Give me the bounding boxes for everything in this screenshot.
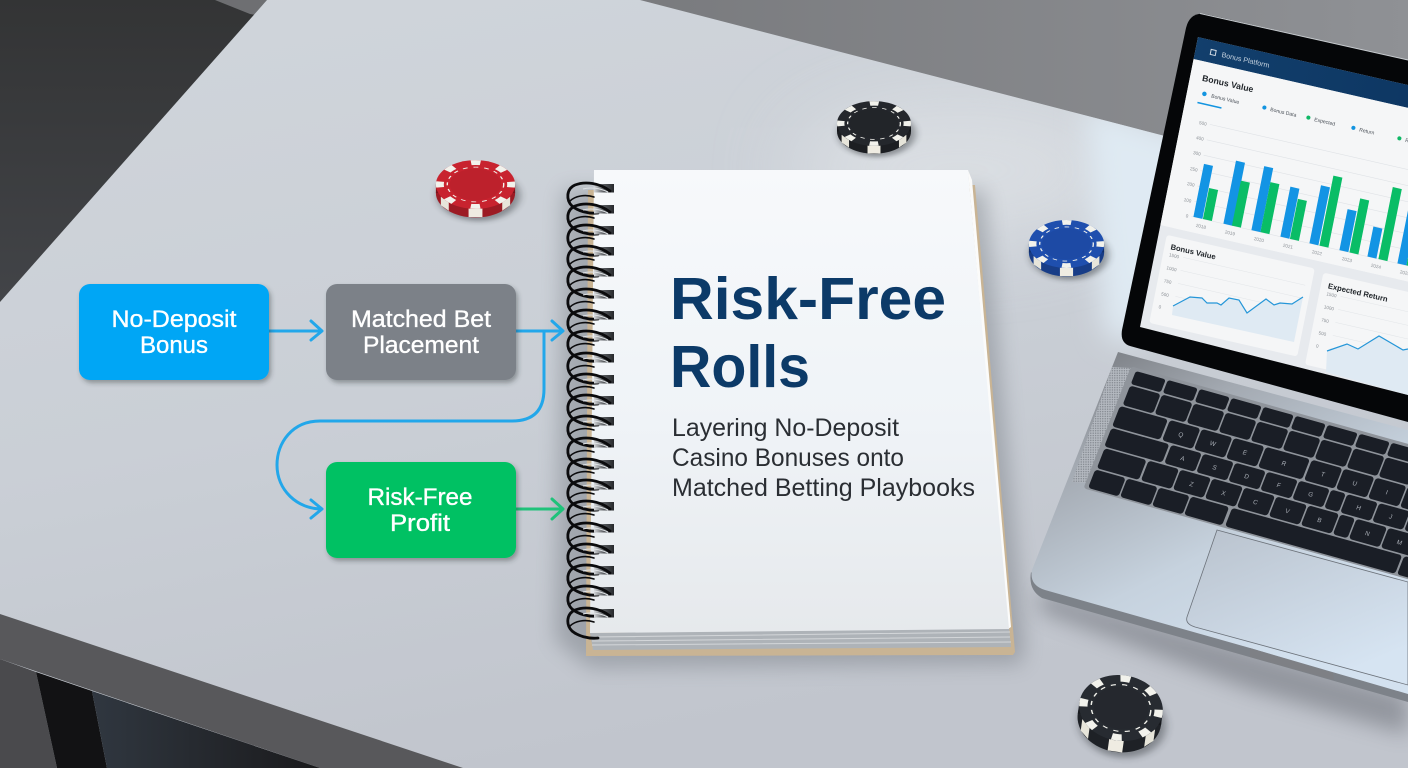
panel: expected return line chart card	[1306, 274, 1408, 370]
laptop base top	[1032, 352, 1408, 694]
y axis labels: 200	[1187, 181, 1195, 188]
line chart: bonus value	[1172, 297, 1303, 342]
dashboard header: Bonus Platform	[1221, 51, 1270, 70]
key legends: I	[1385, 489, 1389, 497]
y axis labels: 250	[1190, 166, 1198, 173]
back page edge	[968, 170, 1011, 629]
title	[670, 266, 946, 400]
key legends: E	[1241, 449, 1248, 457]
y axis labels	[1184, 121, 1207, 218]
bezel highlight	[1200, 14, 1408, 60]
light reflection near laptop	[1084, 115, 1163, 346]
dark floor area top left	[0, 0, 300, 320]
grid and axis	[1191, 124, 1408, 276]
x axis labels: 2024	[1370, 263, 1382, 270]
panel: main bar chart	[1155, 58, 1408, 292]
icon: black poker chip top	[837, 101, 916, 157]
active tab underline	[1197, 102, 1222, 109]
panel: bonus value line chart card: Bonus Value	[1170, 242, 1217, 261]
line chart: expected return	[1326, 336, 1408, 395]
key legends: H	[1355, 504, 1362, 512]
speaker grill	[1072, 367, 1132, 483]
box: no-deposit bonus: Bonus	[140, 332, 208, 359]
key legends: Z	[1188, 481, 1195, 489]
x axis labels: 2022	[1311, 249, 1323, 257]
keyboard keys	[1088, 370, 1408, 589]
key legends: C	[1252, 499, 1259, 507]
flow diagram	[79, 284, 563, 558]
legend: Expected	[1314, 117, 1336, 128]
laptop base side	[1030, 572, 1408, 702]
subtitle: Matched Betting Playbooks	[672, 474, 975, 502]
panel: bonus value line chart card: 1500	[1169, 252, 1180, 260]
panel: expected return line chart card: 0	[1316, 343, 1320, 349]
x axis labels: 2021	[1282, 243, 1294, 250]
legend: Return	[1359, 127, 1375, 137]
legend: Bonus Data	[1270, 107, 1297, 119]
arrow: no-deposit to matched bet	[269, 321, 322, 340]
panel: bonus value line chart card: 1000	[1166, 265, 1177, 273]
box: no-deposit bonus	[79, 284, 269, 380]
panel heading: Bonus Value	[1201, 73, 1255, 94]
y axis labels: 0	[1185, 213, 1189, 219]
x axis labels: 2020	[1253, 236, 1265, 243]
desk front edge	[0, 614, 463, 768]
box: matched bet placement: Placement	[363, 332, 479, 359]
key legends: S	[1211, 464, 1218, 472]
trackpad	[1187, 530, 1408, 685]
box: risk-free profit: Risk-Free	[368, 484, 472, 511]
box: matched bet placement	[326, 284, 516, 380]
key legends: V	[1284, 508, 1291, 516]
trackpad notch	[1250, 648, 1334, 680]
legend: Bonus Value	[1211, 94, 1240, 106]
icon: blue poker chip	[1029, 220, 1109, 280]
key legends: F	[1275, 482, 1282, 490]
light patch on desk upper right	[824, 108, 1080, 233]
floor under the desk	[0, 659, 57, 768]
desk leg	[36, 672, 107, 768]
subtitle: Casino Bonuses onto	[672, 444, 904, 472]
key legends: W	[1209, 440, 1217, 448]
arrow: matched bet to notebook	[516, 321, 563, 340]
panel: expected return line chart card: 750	[1321, 317, 1330, 324]
far floor	[92, 691, 320, 768]
box: risk-free profit	[326, 462, 516, 558]
key legends: A	[1179, 455, 1186, 463]
panel: expected return line chart card: Expected Return	[1327, 281, 1389, 304]
grey wall behind the desk	[215, 0, 1408, 210]
subtitle: Layering No-Deposit	[672, 414, 899, 442]
laptop	[1030, 14, 1408, 735]
notebook page	[590, 170, 1009, 633]
x axis labels: 2019	[1224, 229, 1236, 237]
x axis labels: 2023	[1341, 256, 1353, 263]
panel: bonus value line chart card	[1149, 235, 1315, 357]
x axis labels: 2018	[1195, 223, 1207, 230]
arrow: profit to notebook	[516, 499, 563, 519]
keyboard	[1083, 366, 1408, 591]
key legends: N	[1364, 530, 1371, 538]
notebook shadow	[555, 190, 1024, 668]
y axis labels: 500	[1199, 120, 1208, 127]
key legends: T	[1320, 471, 1326, 479]
arrow: loop to risk-free profit	[277, 331, 544, 518]
key legends: R	[1280, 460, 1288, 468]
panel: expected return line chart card: 500	[1318, 330, 1327, 337]
key legends: X	[1220, 490, 1227, 498]
bar chart	[1193, 160, 1408, 266]
key legends: Q	[1177, 431, 1184, 439]
page stack	[590, 627, 1011, 650]
x axis labels	[1195, 223, 1408, 277]
laptop shadow	[1040, 590, 1408, 735]
desk lighting	[824, 108, 1163, 346]
panel: bonus value line chart card: 500	[1161, 291, 1170, 298]
icon: black poker chip bottom	[1073, 670, 1172, 763]
key legends: M	[1395, 539, 1403, 547]
title: Rolls	[670, 334, 810, 400]
box: matched bet placement: Matched Bet	[351, 306, 491, 333]
key legends: G	[1307, 491, 1314, 499]
spiral binding	[568, 183, 614, 638]
title: Risk-Free	[670, 266, 946, 332]
box: no-deposit bonus: No-Deposit	[112, 306, 237, 333]
key legends: U	[1351, 480, 1359, 488]
key legends: B	[1316, 517, 1323, 524]
panel: expected return line chart card: 1000	[1323, 304, 1335, 312]
panel: bonus value line chart card: 750	[1163, 278, 1172, 285]
notebook	[555, 170, 1024, 668]
subtitle	[672, 414, 975, 502]
notebook cover	[586, 185, 1015, 656]
screen background	[1140, 37, 1408, 395]
legend	[1201, 91, 1408, 147]
key legends	[1161, 431, 1408, 547]
y axis labels: 400	[1196, 135, 1205, 142]
panel: bonus value line chart card: 0	[1158, 304, 1162, 310]
icon: red poker chip	[436, 160, 520, 221]
key legends: D	[1243, 473, 1250, 481]
y axis labels: 300	[1193, 150, 1202, 157]
key legends: J	[1388, 514, 1393, 521]
panel: expected return line chart card: 1500	[1326, 291, 1337, 299]
y axis labels: 100	[1183, 197, 1192, 204]
dashboard header	[1194, 37, 1408, 108]
screen bezel	[1122, 14, 1408, 422]
box: risk-free profit: Profit	[390, 510, 450, 537]
laptop screen	[1140, 37, 1408, 395]
